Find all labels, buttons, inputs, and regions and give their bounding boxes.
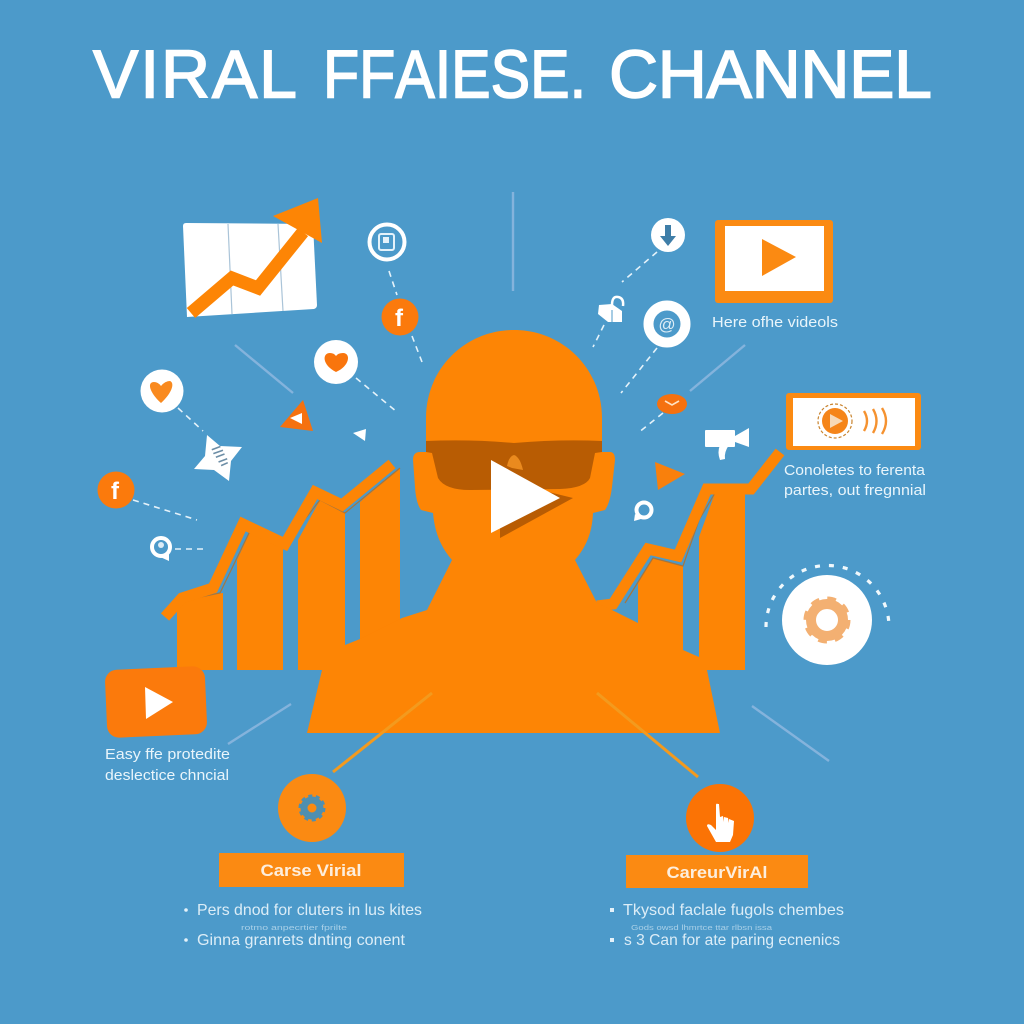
play button shadow <box>500 480 573 538</box>
icon: download circle <box>651 218 685 252</box>
caption: left badge: deslectice chncial <box>105 767 229 784</box>
connector dashes left <box>133 271 422 549</box>
icon: facebook top <box>382 298 418 336</box>
label bar: left: Carse Virial <box>260 861 362 880</box>
audio card right <box>786 393 921 450</box>
bar chart left <box>165 464 400 670</box>
play button <box>491 460 560 533</box>
bullet list: right <box>610 902 844 949</box>
body and head <box>307 330 720 733</box>
nose <box>507 455 523 470</box>
icon: hand pointer circle <box>686 784 754 852</box>
video card top right <box>715 220 833 303</box>
icon: facebook top: f <box>395 305 404 332</box>
connector dashes right <box>593 252 663 433</box>
label bar: right <box>626 855 808 888</box>
bar chart right <box>597 452 780 670</box>
icon: white star <box>194 435 242 481</box>
bullet list: left: Ginna granrets dnting conent <box>197 932 406 949</box>
decorative rays <box>228 192 829 761</box>
caption: left badge <box>105 746 230 784</box>
icon: chat bubble right <box>634 502 652 521</box>
bullet list: right: Tkysod faclale fugols chembes <box>623 902 844 919</box>
icon: chat bubble left <box>152 538 170 561</box>
icon: orange triangle <box>280 400 313 431</box>
icon: heart circle centre <box>314 340 358 384</box>
icon: at-sign circle <box>648 306 686 342</box>
caption: left badge: Easy ffe protedite <box>105 746 230 763</box>
icon: growth chart with arrow <box>183 198 322 317</box>
bullet list: left <box>184 902 422 949</box>
icon: bookmark circle <box>370 224 404 260</box>
label bar: left <box>219 853 404 887</box>
caption: right card: Conoletes to ferenta <box>784 462 926 479</box>
central silhouette figure <box>307 330 720 733</box>
icon: facebook left <box>98 472 134 508</box>
caption: right card: partes, out fregnnial <box>784 482 926 499</box>
caption: videos: Here ofhe videols <box>712 314 838 331</box>
connector lines from figure <box>333 693 698 777</box>
bullet list: left: rotmo anpecrtier fprilte <box>241 925 347 932</box>
bullet list: left: Pers dnod for cluters in lus kites <box>197 902 422 919</box>
title <box>93 36 932 112</box>
icon: lock <box>598 297 623 322</box>
title: CHANNEL <box>609 36 932 112</box>
icon: heart circle left <box>140 370 184 412</box>
title: VIRAL <box>93 36 297 112</box>
label bar: right: CareurVirAl <box>666 863 768 882</box>
caption: right card <box>784 462 926 499</box>
icon: small white triangle <box>353 429 366 441</box>
icon: video play badge left <box>105 666 207 738</box>
icon: facebook left: f <box>111 478 120 505</box>
icon: orange triangle right <box>655 462 685 490</box>
sunglasses <box>426 440 602 490</box>
icon: gear circle <box>278 774 346 842</box>
bullet list: right: s 3 Can for ate paring ecnenics <box>624 932 840 949</box>
bullet list: right: Gods owsd lhmrtce ttar rlbsn issa <box>631 925 772 932</box>
title: FFAIESE. <box>323 36 586 112</box>
icon: gear in white circle with dashed arc <box>766 566 889 665</box>
icon: white camera <box>705 428 749 460</box>
icon: orange mail oval <box>657 394 687 414</box>
icon: at-sign circle: @ <box>658 315 676 334</box>
